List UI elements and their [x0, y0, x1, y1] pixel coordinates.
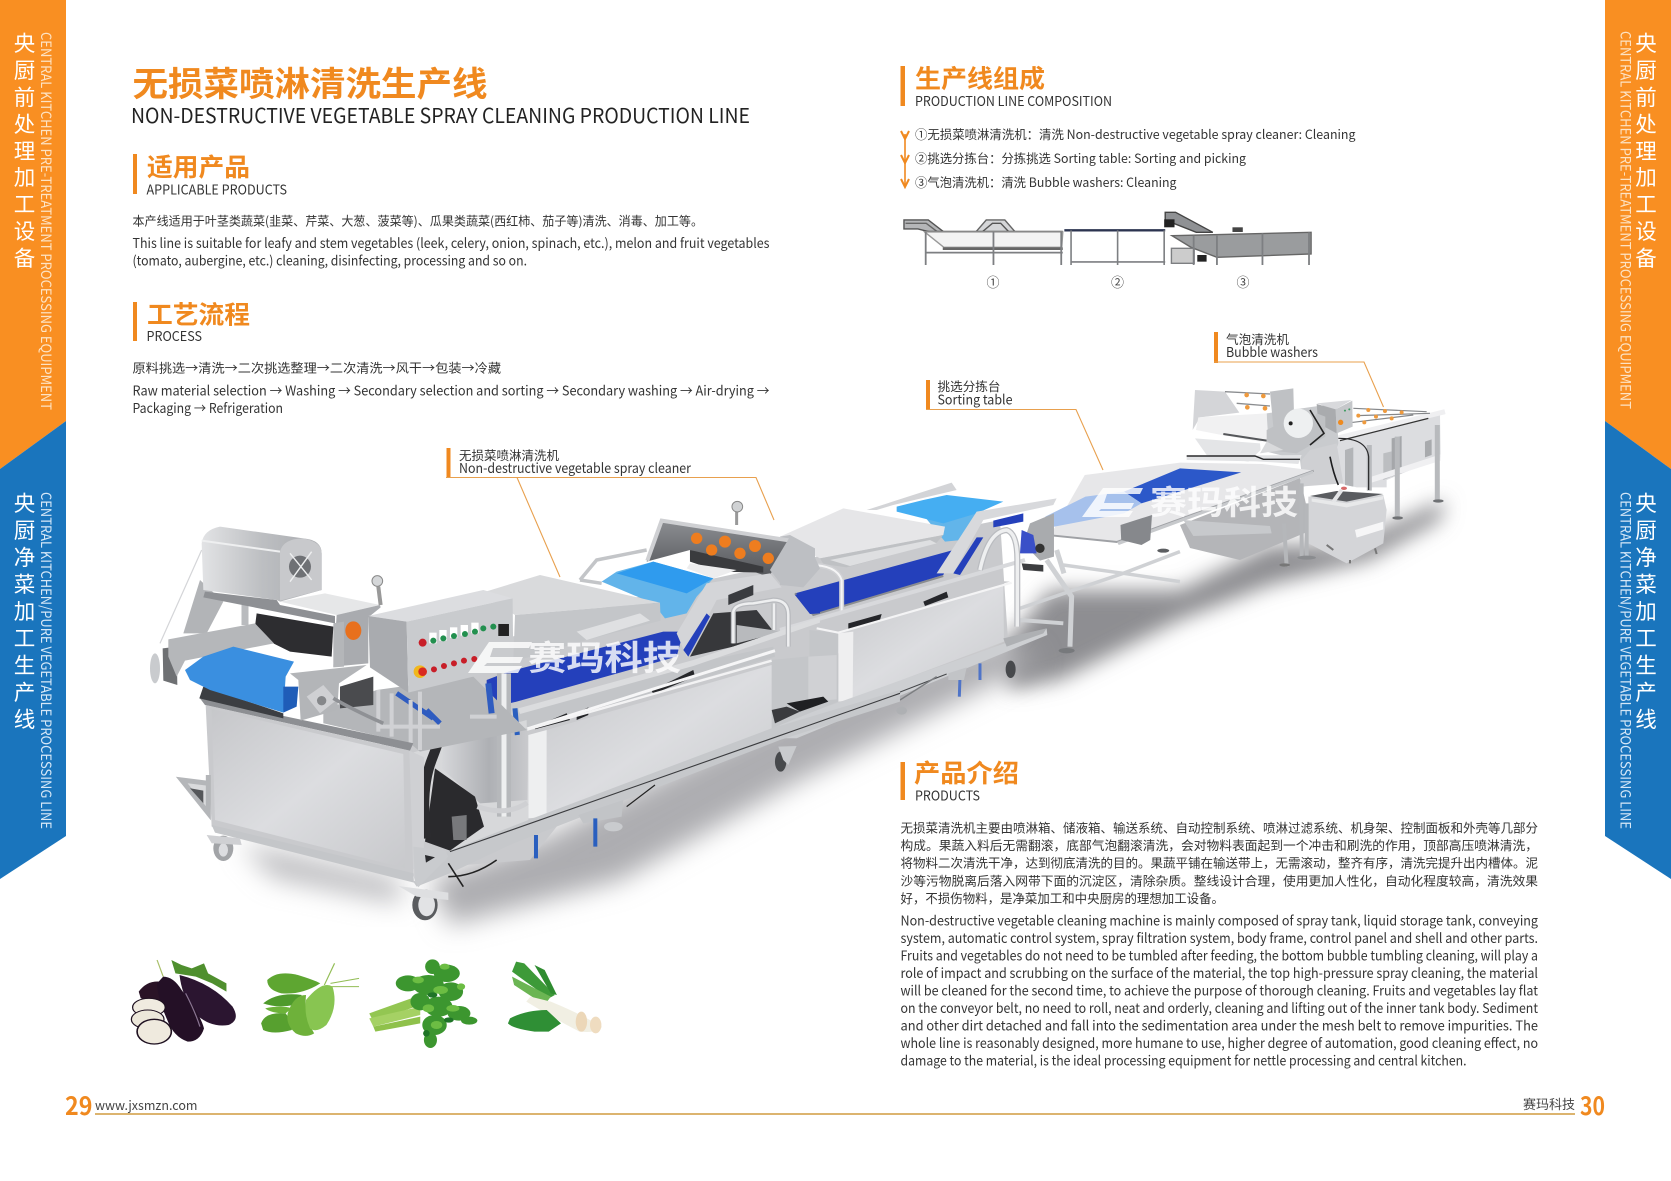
machine: underlay behind center and second tank — [395, 520, 1008, 870]
drum hood — [1193, 390, 1239, 430]
page number 30: 30 — [1580, 1087, 1605, 1123]
infeed frame — [150, 623, 283, 718]
infeed blue belt — [185, 647, 294, 713]
right band: chinese label pre-treatment: 加 — [1635, 161, 1657, 192]
dark blue main belt — [487, 632, 683, 708]
frame rail — [780, 628, 1047, 738]
right band: chinese label pure vegetable: 厨 — [1635, 514, 1657, 545]
drum support — [1267, 403, 1338, 487]
list: composition steps: ③气泡清洗机：清洗 Bubble washers: Cleaning — [915, 172, 1176, 191]
side frame and disc — [1267, 388, 1325, 453]
text block: products chinese: 将物料二次清洗干净，达到彻底清洗的目的。果蔬平铺在输送带上，无需滚动，整齐有序，清洗完提升出内槽体。泥 — [900, 852, 1538, 872]
drum body — [1196, 413, 1268, 442]
base frame right — [413, 847, 448, 887]
right band: chinese label pre-treatment: 理 — [1635, 135, 1657, 166]
heading: applicable products — [133, 148, 287, 198]
orange nozzle — [345, 621, 361, 640]
control buttons — [414, 623, 509, 678]
watermark near machine — [468, 631, 681, 680]
heading: process: 工艺流程 — [147, 296, 250, 332]
panel: production line composition — [900, 60, 1356, 291]
hose from bearing — [333, 698, 383, 723]
panel: products — [900, 754, 1538, 1070]
watermark text: 赛玛科技 — [1150, 476, 1298, 524]
rim of tank 1 — [522, 651, 775, 731]
text block: applicable products chinese: 本产线适用于叶茎类蔬菜(韭菜、芹菜、大葱、菠菜等)、瓜果类蔬菜(西红柿、茄子等)清洗、消毒、加工等。 — [132, 210, 703, 230]
right frame plate — [290, 665, 367, 721]
left band: chinese label pure vegetable: 产 — [14, 676, 35, 707]
right band: chinese label pre-treatment: 处 — [1635, 108, 1657, 139]
gap between tanks — [772, 653, 838, 728]
table back edge — [1050, 463, 1314, 542]
right belt start — [795, 587, 820, 614]
right band: chinese label pure vegetable: 净 — [1635, 541, 1657, 572]
text block: process english: Raw material selection → Washing → Secondary selection and sorting → Secondary washing → Air-drying → — [132, 380, 770, 400]
right band: chinese label pure vegetable: 产 — [1635, 676, 1657, 707]
heading: applicable products: 适用产品 — [147, 148, 250, 184]
left band: chinese label pre-treatment: 工 — [14, 188, 35, 219]
black cable — [448, 860, 497, 887]
caster and valves — [1006, 661, 1016, 678]
right band: chinese label pre-treatment: 前 — [1635, 81, 1657, 112]
sorting table blue belt — [1124, 468, 1241, 503]
watermark on sorting table — [1082, 476, 1298, 524]
top box — [480, 575, 660, 615]
right band: blue tab — [1605, 421, 1671, 879]
machine: left section with fan hood, infeed and control box — [150, 527, 527, 920]
left band: chinese label pure vegetable: 加 — [14, 595, 35, 626]
long hood — [780, 508, 945, 558]
icon: celery — [369, 959, 477, 1048]
title chinese: 无损菜喷淋清洗生产线 — [132, 57, 488, 106]
panel: process — [132, 296, 770, 417]
vegetable images row — [131, 959, 602, 1048]
cavity — [410, 673, 528, 851]
heading: applicable products: APPLICABLE PRODUCTS — [146, 178, 287, 198]
right dark belt — [795, 550, 953, 615]
label: circled numbers under diagram: ② — [1111, 272, 1124, 291]
left side band — [0, 0, 66, 879]
chamber gauge — [732, 501, 743, 525]
callout: bubble washers — [1214, 329, 1384, 407]
right band: chinese label pure vegetable: 工 — [1635, 622, 1657, 653]
right band: chinese label pure vegetable: 生 — [1635, 649, 1657, 680]
incline frame — [937, 498, 1057, 573]
right side band — [1605, 0, 1671, 879]
text block: products english: Non-destructive vegetable cleaning machine is mainly composed of spray tank, liquid storage tank, conveying — [900, 910, 1538, 930]
heading: products: PRODUCTS — [915, 784, 980, 804]
machine: center section with spray chamber — [480, 501, 820, 732]
callout: sorting table — [926, 376, 1103, 470]
right band: chinese label pure vegetable: 线 — [1635, 703, 1657, 734]
right band: chinese label pre-treatment: 备 — [1635, 242, 1657, 273]
long rail — [518, 617, 820, 714]
left band: chinese label pre-treatment: 设 — [14, 215, 35, 246]
page number 29: 29 — [65, 1087, 92, 1123]
left band: chinese label pre-treatment: 理 — [14, 135, 35, 166]
text block: products english: system, automatic control system, spray filtration system, body frame, control panel and shell and other parts. — [900, 927, 1538, 947]
left band: orange tab — [0, 0, 66, 469]
middle machinery — [323, 677, 527, 752]
left band: chinese label pure vegetable: 生 — [14, 649, 35, 680]
heading: production line composition — [900, 60, 1112, 110]
control box — [368, 590, 513, 693]
diagram: side view of the line — [904, 212, 1311, 265]
footer — [65, 1087, 1605, 1123]
callout: spray cleaner: 无损菜喷淋清洗机 — [459, 445, 559, 464]
chamber end plate — [770, 537, 820, 587]
text block: products english: Fruits and vegetables do not need to be tumbled after feeding, the bottom bubble tumbling cleaning, will play a — [900, 944, 1538, 964]
heading: process: PROCESS — [146, 325, 202, 345]
text block: products english: on the conveyor belt, no need to roll, neat and orderly, cleaning and lifting out of the inner tank body. Sediment — [900, 997, 1538, 1017]
machine ground shadow — [240, 500, 1445, 925]
left gauge — [372, 576, 383, 605]
heading: production line composition: 生产线组成 — [915, 60, 1045, 96]
watermark text: 赛玛科技 — [528, 631, 681, 680]
left band: chinese label pre-treatment: 厨 — [14, 54, 35, 85]
light blue incline belt — [602, 562, 713, 618]
right band: chinese label pure vegetable: 央 — [1635, 487, 1657, 518]
heading: process — [133, 296, 250, 345]
company name: 赛玛科技 — [1523, 1094, 1575, 1113]
right band: english label pre-treatment: CENTRAL KITCHEN PRE-TREATMENT PROCESSING EQUIPMENT — [1616, 31, 1636, 409]
list: composition steps: ②挑选分拣台：分拣挑选 Sorting table: Sorting and picking — [915, 148, 1246, 167]
thin back leg and stands — [160, 550, 245, 643]
right band: chinese label pre-treatment: 工 — [1635, 188, 1657, 219]
small pipe — [810, 565, 842, 613]
icon: flow arrows — [901, 131, 909, 187]
roller unit — [1023, 513, 1054, 561]
right band: chinese label pre-treatment: 央 — [1635, 27, 1657, 58]
callout: spray cleaner: Non-destructive vegetable spray cleaner — [459, 457, 692, 477]
right band: chinese label pre-treatment: 设 — [1635, 215, 1657, 246]
inner wall of tank 1 — [517, 647, 775, 732]
text block: process english: Packaging → Refrigeration — [132, 397, 283, 417]
second tank — [780, 560, 1025, 702]
title — [131, 57, 750, 129]
base frame left — [182, 775, 208, 813]
label: circled numbers under diagram: ① — [986, 272, 1000, 291]
left band: chinese label pure vegetable: 线 — [14, 703, 35, 734]
text block: products english: and other dirt detached and fall into the sedimentation area under the mesh belt to remove impurities. The — [900, 1014, 1538, 1034]
tank front — [547, 665, 772, 817]
back rails of second belt — [867, 483, 957, 510]
callout: bubble washers: Bubble washers — [1226, 341, 1318, 361]
text block: products english: will be cleaned for the second time, to achieve the purpose of thorough cleaning. Fruits and vegetables lay flat — [900, 980, 1538, 1000]
label: circled numbers under diagram: ③ — [1236, 272, 1250, 291]
left band: chinese label pre-treatment: 处 — [14, 108, 35, 139]
text block: products english: damage to the material, is the ideal processing equipment for nettle processing and central kitchen. — [900, 1050, 1466, 1070]
far caster — [775, 746, 797, 772]
icon: spinach — [261, 963, 359, 1036]
end plate — [780, 535, 815, 587]
left band: chinese label pre-treatment: 备 — [14, 242, 35, 273]
left band: chinese label pure vegetable: 厨 — [14, 514, 35, 545]
text block: process chinese: 原料挑选→清洗→二次挑选整理→二次清洗→风干→包装→冷藏 — [132, 358, 502, 376]
big vertical pipe — [497, 673, 511, 817]
callout: sorting table: 挑选分拣台 — [938, 376, 1000, 395]
machine: underlay behind table — [1180, 478, 1312, 560]
orange spray nozzles — [691, 533, 774, 564]
control box — [1317, 400, 1353, 433]
icon: watermark logo — [468, 642, 532, 673]
casters — [207, 835, 448, 920]
text block: products chinese: 构成。果蔬入料后无需翻滚，底部气泡翻滚清洗，会对物料表面起到一个冲击和刷洗的作用，顶部高压喷淋清洗， — [900, 835, 1538, 854]
right band: chinese label pre-treatment: 厨 — [1635, 54, 1657, 85]
heading: products — [900, 754, 1019, 804]
left band: chinese label pure vegetable: 央 — [14, 487, 35, 518]
cabinet — [200, 698, 424, 883]
left band: chinese label pure vegetable: 工 — [14, 622, 35, 653]
callout: spray cleaner — [446, 445, 774, 577]
u pipe — [980, 530, 1017, 627]
bearing — [307, 685, 337, 713]
spray chamber — [647, 520, 790, 577]
footer rule — [95, 1113, 1575, 1115]
machine: tank 1 and lower frame — [410, 653, 900, 887]
black hose — [424, 688, 455, 838]
incline frame — [677, 573, 783, 657]
panel: applicable products — [132, 148, 770, 270]
text block: products chinese: 好，不损伤物料，是净菜加工和中央厨房的理想加工设备。 — [900, 888, 1224, 907]
list: composition steps: ①无损菜喷淋清洗机：清洗 Non-destructive vegetable spray cleaner: Cleaning — [915, 124, 1356, 143]
text block: applicable products english: This line is suitable for leafy and stem vegetables (leek, celery, onion, spinach, etc.), melon and fruit vegetables — [132, 232, 770, 252]
left band: chinese label pure vegetable: 菜 — [14, 568, 35, 599]
right band: chinese label pure vegetable: 加 — [1635, 595, 1657, 626]
machine: sorting table surface — [1045, 463, 1314, 545]
website: www.jxsmzn.com — [95, 1095, 198, 1114]
title english: NON-DESTRUCTIVE VEGETABLE SPRAY CLEANING PRODUCTION LINE — [131, 99, 750, 129]
left band: english label pure vegetable: CENTRAL KITCHEN/PURE VEGETABLE PROCESSING LINE — [36, 492, 56, 829]
table legs at far end — [1284, 483, 1307, 567]
right band: chinese label pure vegetable: 菜 — [1635, 568, 1657, 599]
icon: eggplants — [131, 960, 236, 1044]
left band: english label pre-treatment: CENTRAL KITCHEN PRE-TREATMENT PROCESSING EQUIPMENT — [36, 32, 56, 410]
icon: watermark logo — [1082, 488, 1143, 517]
table legs and bars — [1020, 550, 1180, 647]
heading: production line composition: PRODUCTION LINE COMPOSITION — [915, 90, 1112, 110]
right band: english label pure vegetable: CENTRAL KITCHEN/PURE VEGETABLE PROCESSING LINE — [1616, 492, 1636, 829]
left band: chinese label pre-treatment: 央 — [14, 27, 35, 58]
text block: products chinese: 沙等污物脱离后落入网带下面的沉淀区，清除杂质。整线设计合理，使用更加人性化，自动化程度较高，清洗效果 — [900, 870, 1538, 890]
foot and drain — [578, 785, 655, 831]
table front edge — [1050, 471, 1314, 542]
callout: bubble washers: 气泡清洗机 — [1226, 329, 1289, 348]
pipes — [733, 600, 788, 647]
blue valve handles — [536, 818, 595, 858]
machine: bubble washer and drum (far end) — [1183, 388, 1445, 567]
left band: chinese label pure vegetable: 净 — [14, 541, 35, 572]
text block: applicable products english: (tomato, aubergine, etc.) cleaning, disinfecting, processing and so on. — [132, 250, 527, 270]
left band: blue tab — [0, 421, 66, 879]
text block: products chinese: 无损菜清洗机主要由喷淋箱、储液箱、输送系统、自动控制系统、喷淋过滤系统、机身架、控制面板和外壳等几部分 — [900, 818, 1538, 836]
small pump box — [1308, 487, 1387, 563]
text block: products english: role of impact and scrubbing on the surface of the material, the top high-pressure spray cleaning, the material — [900, 962, 1538, 982]
right band: orange tab — [1605, 0, 1671, 469]
table on top — [203, 592, 381, 667]
left band: chinese label pre-treatment: 加 — [14, 161, 35, 192]
black drum — [255, 613, 333, 657]
second incline light blue belt — [923, 513, 977, 542]
back rails — [580, 550, 647, 583]
base bar — [1187, 455, 1302, 464]
heading: products: 产品介绍 — [914, 754, 1019, 790]
fan hood — [202, 527, 322, 602]
machine: second tank, incline and table legs — [780, 483, 1180, 738]
icon: scallion — [508, 962, 602, 1033]
left band: chinese label pre-treatment: 前 — [14, 81, 35, 112]
lower frame — [413, 690, 900, 887]
under-table chute — [1120, 515, 1152, 545]
text block: products english: whole line is reasonably designed, more humane to use, higher degree of automation, good cleaning effect, no — [900, 1032, 1538, 1052]
table feet — [1059, 648, 1075, 653]
bubble tank body — [1337, 408, 1445, 520]
callout: sorting table: Sorting table — [938, 388, 1012, 408]
